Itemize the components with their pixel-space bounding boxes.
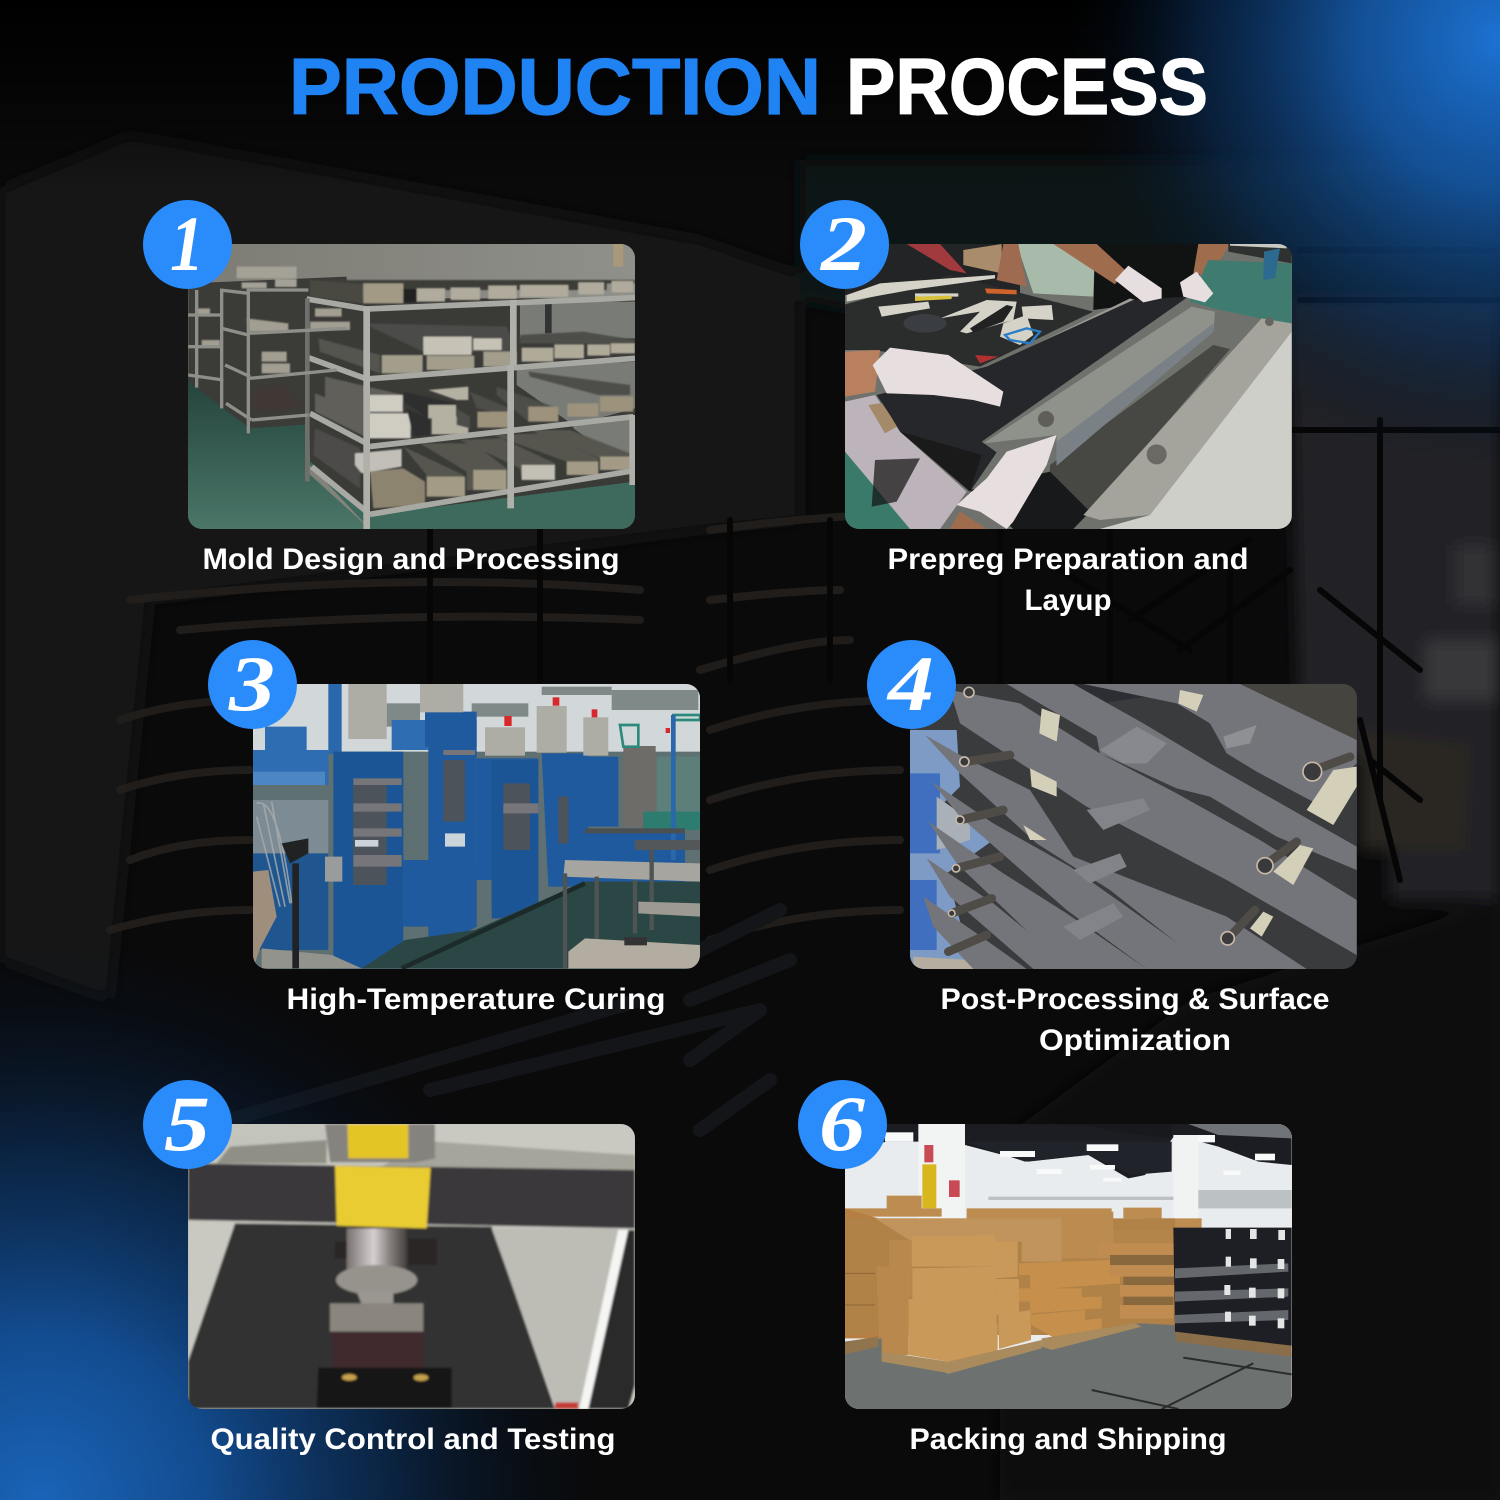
panel: step 6 packing — [798, 1080, 1293, 1456]
label: Post-Processing & Surface — [940, 983, 1330, 1016]
icon: number 5 badge — [143, 1080, 232, 1169]
photo: test machine close-up — [187, 1122, 637, 1412]
label: Packing and Shipping — [910, 1423, 1226, 1456]
icon: number 3 badge — [208, 640, 297, 729]
panel: step 2 prepreg — [800, 200, 1293, 617]
panel: step 5 quality testing — [143, 1080, 637, 1456]
icon: number 6 badge: 6 — [819, 1080, 865, 1167]
icon: number 1 badge — [143, 200, 232, 289]
panel: step 1 mold design — [143, 200, 637, 576]
label: High-Temperature Curing — [286, 983, 666, 1016]
label — [940, 983, 1330, 1057]
icon: number 5 badge: 5 — [164, 1080, 210, 1167]
icon: number 4 badge — [867, 640, 956, 729]
label — [888, 543, 1248, 617]
icon: number 6 badge — [798, 1080, 887, 1169]
title: PRODUCTION — [289, 42, 821, 131]
photo: shelves with metal blocks — [187, 242, 637, 532]
icon: number 4 badge: 4 — [886, 640, 934, 727]
photo: blue curing presses — [252, 682, 702, 972]
photo: hands laying carbon prepreg — [843, 242, 1293, 532]
title: PROCESS — [846, 42, 1208, 131]
photo: carbon blades on rack — [908, 682, 1358, 972]
label: Quality Control and Testing — [210, 1423, 616, 1456]
icon: number 2 badge — [800, 200, 889, 289]
label: Layup — [1024, 584, 1112, 617]
panel: step 3 curing — [208, 640, 702, 1016]
rack of dark blades — [110, 250, 1500, 1130]
label: Mold Design and Processing — [202, 543, 620, 576]
photo: warehouse with cartons — [843, 1122, 1293, 1412]
icon: number 1 badge: 1 — [170, 200, 204, 287]
panel: step 4 post-processing — [867, 640, 1358, 1057]
icon: number 2 badge: 2 — [820, 200, 867, 287]
title — [289, 42, 1208, 131]
icon: number 3 badge: 3 — [228, 640, 275, 727]
label: Optimization — [1039, 1024, 1231, 1057]
label: Prepreg Preparation and — [888, 543, 1248, 576]
